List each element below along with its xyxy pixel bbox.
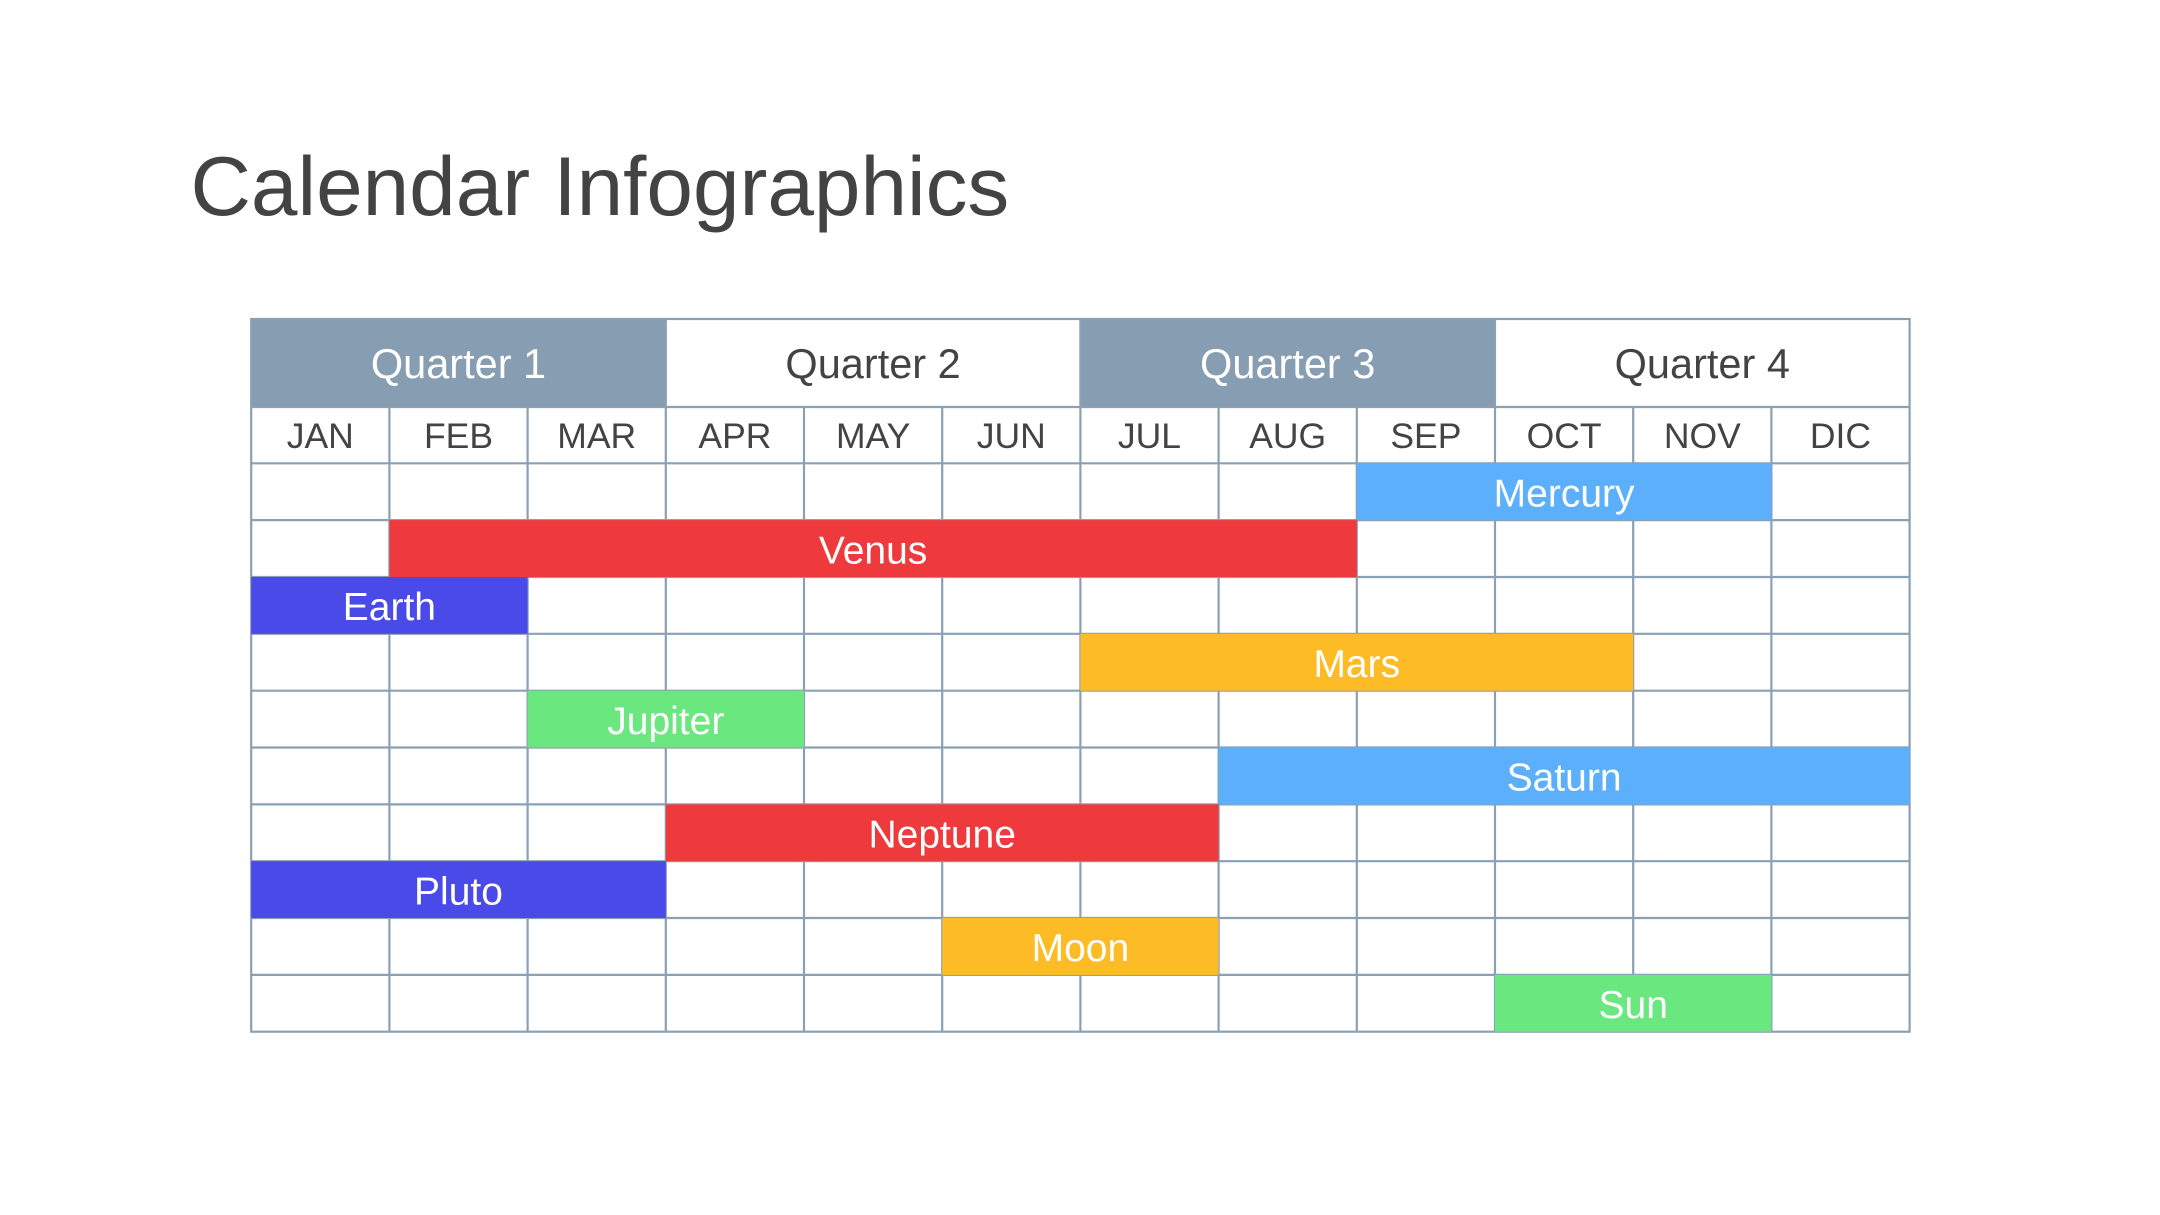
month labels: SEP: [1390, 416, 1461, 456]
bar: Mercury: [1357, 463, 1771, 520]
month labels: MAY: [836, 416, 910, 456]
month labels: NOV: [1664, 416, 1741, 456]
month labels: FEB: [424, 416, 493, 456]
month labels: AUG: [1249, 416, 1326, 456]
quarter header row: Quarter 4: [1615, 340, 1790, 387]
bar: Jupiter: Jupiter: [607, 700, 724, 743]
bar: Mercury: Mercury: [1494, 472, 1635, 515]
bar: Pluto: Pluto: [414, 870, 503, 913]
month labels: JUN: [977, 416, 1046, 456]
month labels: OCT: [1527, 416, 1602, 456]
bar: Sun: [1495, 975, 1771, 1032]
bar: Neptune: [666, 804, 1219, 861]
quarter header row: [251, 319, 1790, 407]
quarter header row: Quarter 2: [785, 340, 961, 387]
bar: Earth: Earth: [343, 586, 436, 629]
grid lines: [251, 319, 1910, 1032]
title: Calendar Infographics: [190, 139, 1009, 233]
month labels: JUL: [1118, 416, 1181, 456]
bar: Mars: [1080, 634, 1633, 691]
bar: Saturn: [1219, 748, 1910, 804]
quarter header row: Quarter 1: [371, 340, 546, 387]
month labels: [287, 416, 1871, 456]
bar: Sun: Sun: [1598, 984, 1668, 1027]
month labels: DIC: [1810, 416, 1871, 456]
bar: Jupiter: [528, 691, 804, 748]
bar: Saturn: Saturn: [1507, 757, 1622, 800]
bar: Mars: Mars: [1313, 643, 1400, 686]
quarter header row: Quarter 3: [1200, 340, 1375, 387]
month labels: APR: [698, 416, 771, 456]
month labels: JAN: [287, 416, 354, 456]
bar: Moon: [942, 918, 1219, 975]
month labels: MAR: [557, 416, 636, 456]
bar: Pluto: [251, 861, 666, 918]
bar: Moon: Moon: [1032, 927, 1129, 970]
calendar table: [251, 319, 1910, 1032]
bar: Neptune: Neptune: [868, 814, 1016, 856]
bar: Earth: [251, 577, 528, 634]
bar: Venus: Venus: [819, 529, 927, 572]
bar: Venus: [389, 520, 1357, 577]
